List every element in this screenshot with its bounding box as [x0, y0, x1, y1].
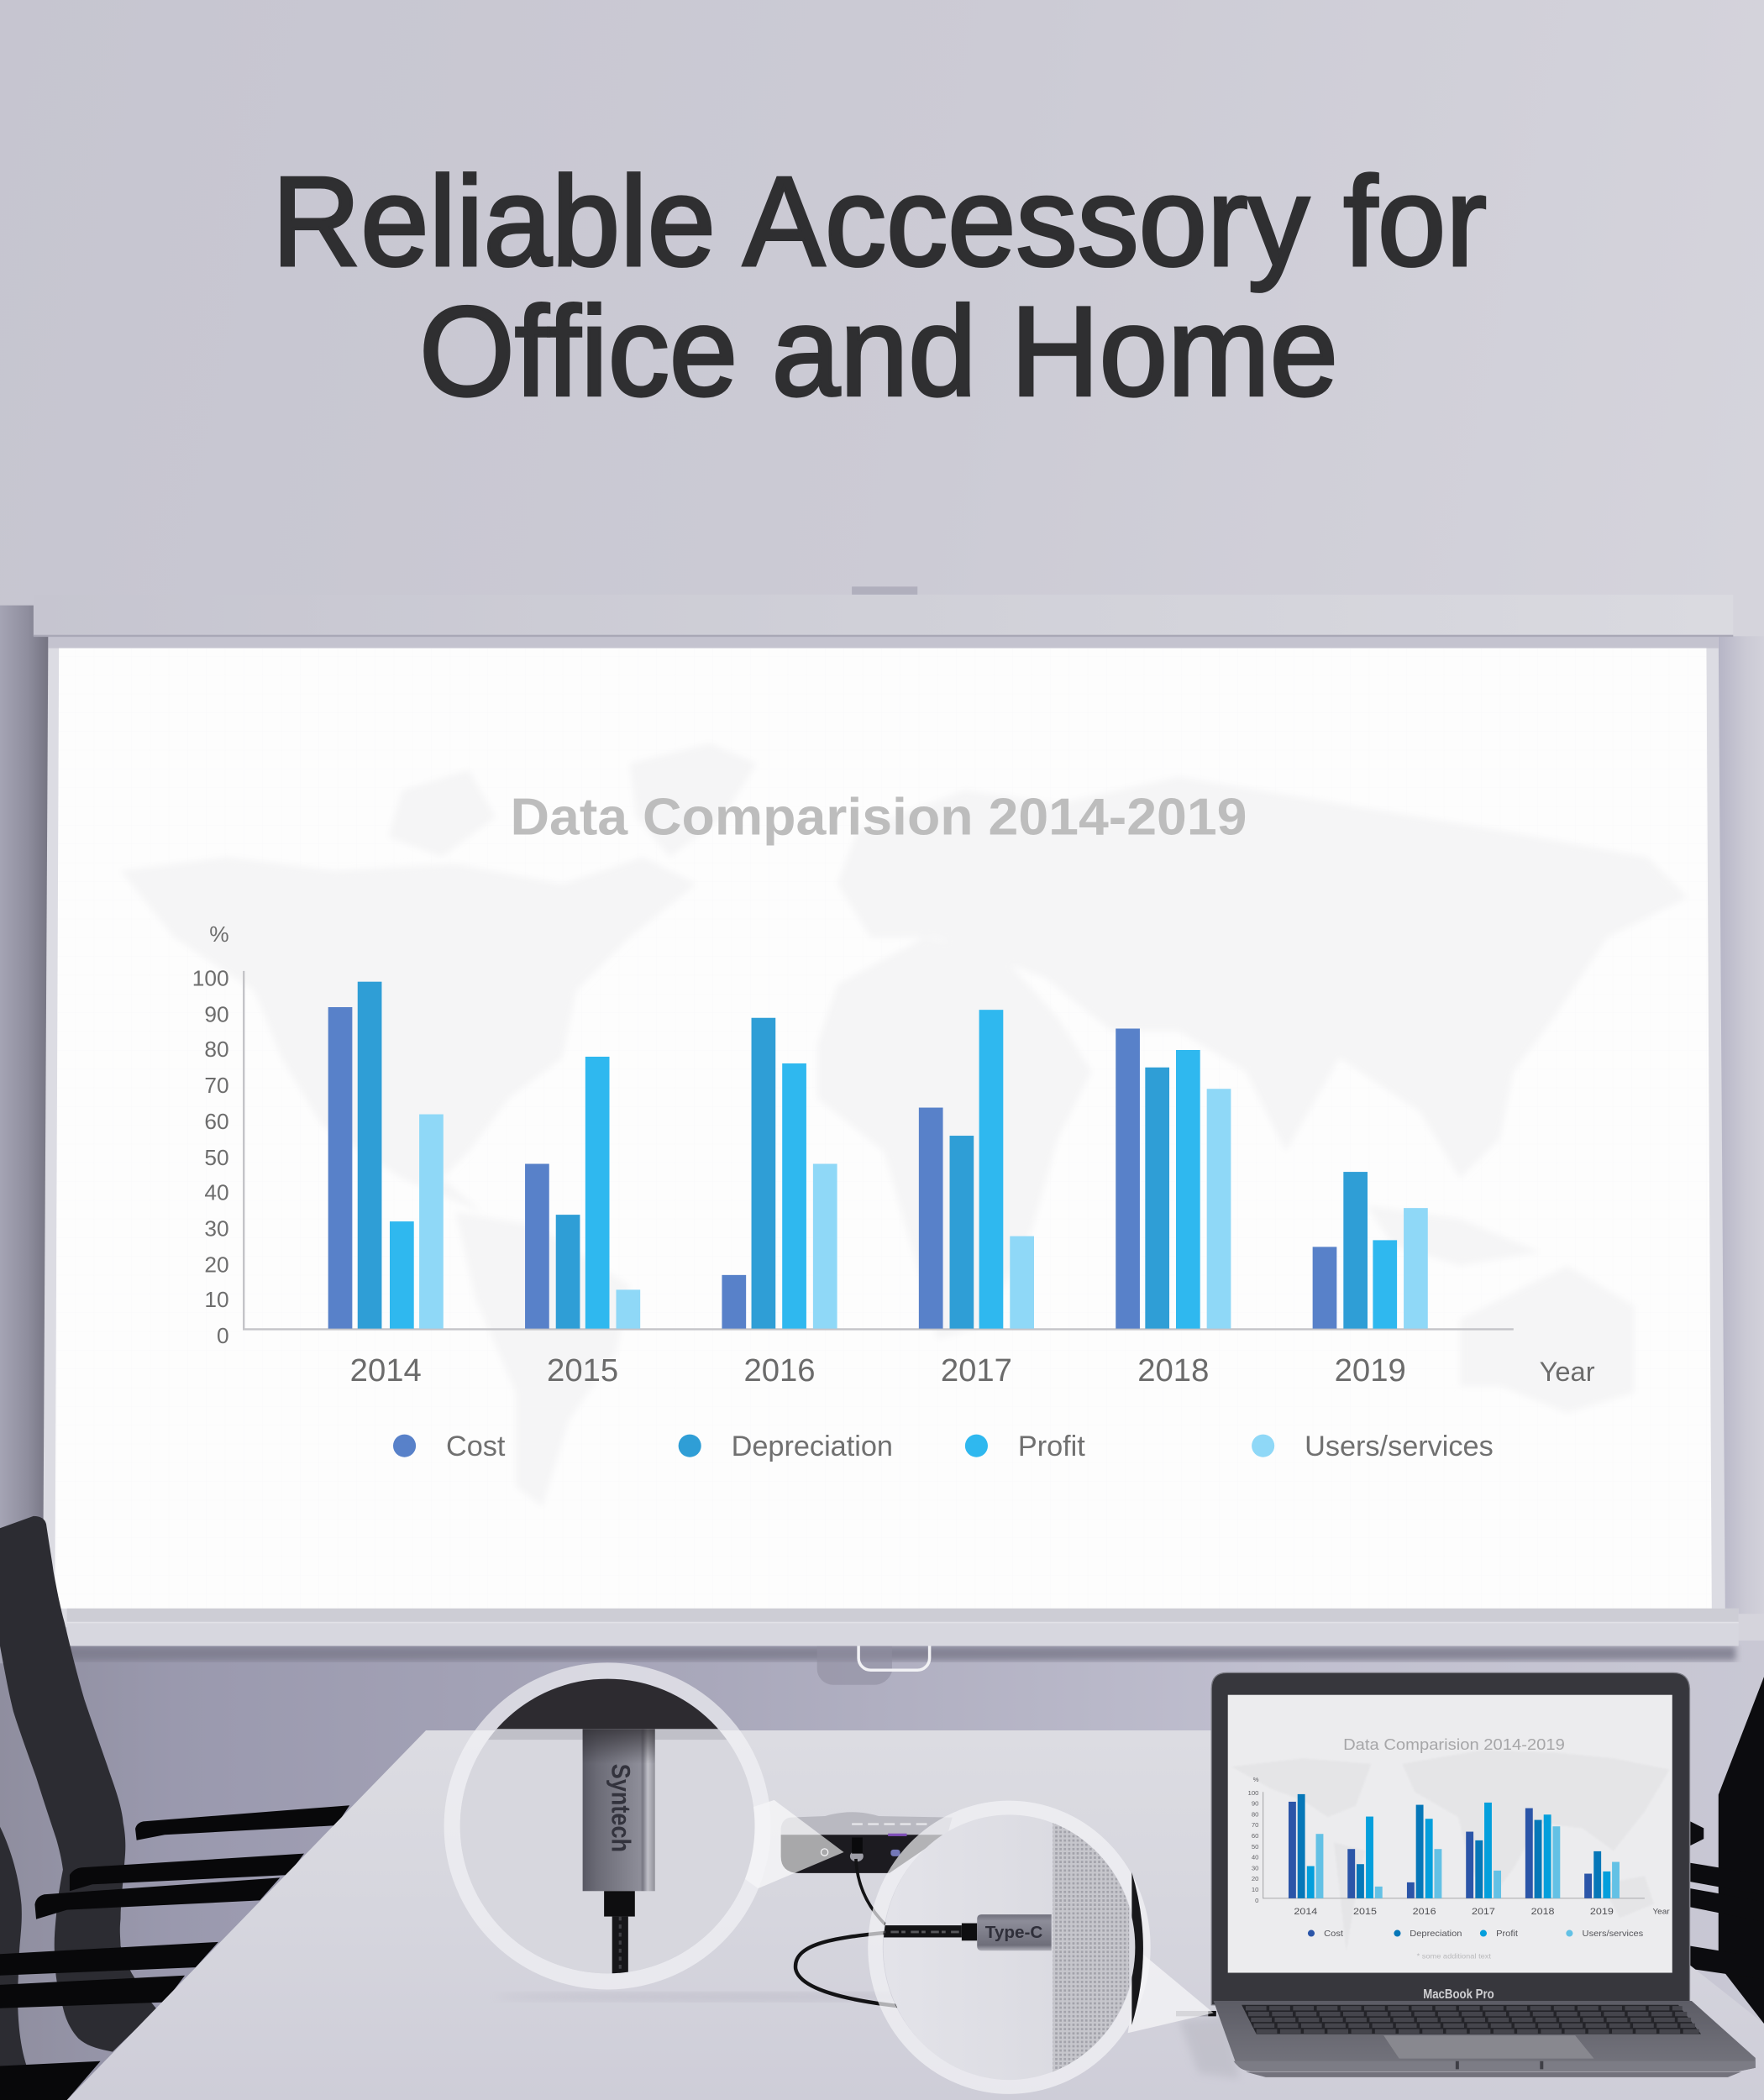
top frame band — [48, 636, 1719, 648]
left chair — [0, 1516, 349, 2100]
table — [67, 1730, 1764, 2100]
laptop x axis labels: 2019 — [1590, 1905, 1614, 1917]
y axis labels: 70 — [204, 1073, 229, 1098]
laptop y axis labels: 90 — [1252, 1800, 1258, 1807]
chart legend: Depreciation — [732, 1431, 893, 1462]
axes — [244, 971, 1514, 1329]
laptop legend: Profit — [1496, 1929, 1518, 1939]
laptop base — [1214, 2001, 1756, 2071]
laptop y axis labels: 20 — [1252, 1876, 1258, 1882]
port — [850, 1851, 864, 1861]
laptop lid — [1211, 1672, 1690, 2005]
laptop screen — [1228, 1695, 1672, 1973]
laptop legend: Users/services — [1583, 1929, 1643, 1939]
x axis labels: 2016 — [743, 1352, 816, 1389]
world map watermark — [121, 743, 1688, 1507]
laptop y axis labels: 40 — [1252, 1854, 1258, 1861]
bars 2019 — [1313, 1172, 1428, 1329]
lower wall — [0, 1641, 1764, 2100]
laptop y axis labels: 10 — [1252, 1887, 1258, 1893]
right chair — [1690, 1677, 1764, 2024]
laptop edge crescent — [1131, 1872, 1143, 2025]
table shadow — [496, 1992, 1005, 2002]
adapter body — [583, 1729, 655, 1891]
screen frame — [43, 636, 1725, 1627]
monitor bezel — [496, 1678, 718, 1729]
y axis labels: 30 — [204, 1216, 229, 1242]
chart legend: Users/services — [1305, 1431, 1494, 1462]
laptop y axis labels: 30 — [1252, 1865, 1258, 1872]
title: Office and Home — [419, 281, 1338, 423]
strain relief — [962, 1924, 977, 1940]
laptop x axis labels: 2018 — [1531, 1905, 1555, 1917]
laptop keyboard — [1242, 2005, 1701, 2034]
pointer: right magnifier — [1128, 1953, 1214, 2033]
laptop y axis labels: 60 — [1252, 1833, 1258, 1840]
x axis labels: 2014 — [350, 1352, 422, 1389]
cable strain relief — [604, 1891, 635, 1917]
x axis labels — [350, 1352, 1595, 1389]
bars 2018 — [1116, 1028, 1231, 1329]
bars 2014 — [328, 982, 444, 1329]
bars 2015 — [525, 1057, 640, 1329]
y axis labels: 10 — [204, 1287, 229, 1312]
Type-C label: Type-C — [985, 1923, 1042, 1942]
x axis labels: Year — [1540, 1356, 1595, 1387]
laptop shadow on table — [1179, 2016, 1239, 2078]
y axis labels: 20 — [204, 1252, 229, 1278]
laptop legend: Depreciation — [1410, 1929, 1462, 1939]
laptop world map — [1231, 1750, 1670, 1951]
title — [272, 151, 1487, 423]
chart title: Data Comparision 2014-2019 — [511, 788, 1247, 846]
laptop y axis labels: 80 — [1252, 1811, 1258, 1818]
bars 2017 — [919, 1010, 1034, 1329]
shadow under screen — [61, 1646, 1736, 1661]
laptop y axis labels — [1248, 1776, 1259, 1904]
blue port — [890, 1850, 900, 1856]
bars 2016 — [722, 1018, 837, 1329]
screen shadow on left wall — [0, 606, 50, 1663]
y axis labels: 80 — [204, 1037, 229, 1062]
laptop legend: Cost — [1324, 1929, 1343, 1939]
laptop axes — [1263, 1792, 1645, 1898]
laptop legend — [1308, 1929, 1643, 1939]
laptop screen content — [1231, 1736, 1670, 1960]
pull handle — [817, 1646, 930, 1685]
laptop y axis labels: 100 — [1248, 1789, 1258, 1797]
title: Reliable Accessory for — [272, 151, 1487, 293]
roller hook — [852, 586, 917, 595]
laptop x axis labels: 2014 — [1294, 1905, 1318, 1917]
laptop speaker grille — [1053, 1823, 1129, 2071]
laptop front bevel — [1234, 2061, 1756, 2071]
projector screen — [34, 586, 1739, 1685]
laptop y axis labels: 0 — [1255, 1897, 1258, 1904]
second chair back — [0, 1827, 27, 2100]
laptop base shadow — [1246, 2072, 1741, 2077]
chart legend — [393, 1431, 1494, 1462]
y axis labels: 40 — [204, 1180, 229, 1205]
white projection surface — [55, 648, 1712, 1609]
laptop x axis labels: 2015 — [1353, 1905, 1377, 1917]
laptop model label: MacBook Pro — [1423, 1987, 1494, 2002]
armrests — [0, 1805, 349, 2100]
status strip — [888, 1834, 906, 1836]
device top buttons — [852, 1824, 927, 1825]
y axis labels: 60 — [204, 1109, 229, 1134]
y axis labels: 0 — [217, 1323, 229, 1348]
laptop trackpad — [1383, 2035, 1593, 2059]
laptop y axis labels: % — [1253, 1776, 1259, 1783]
mini PC — [781, 1812, 953, 1873]
braided cable — [612, 1917, 628, 1974]
Type-C body — [977, 1914, 1052, 1950]
laptop x axis labels: Year — [1652, 1908, 1670, 1916]
bottom bar — [67, 1609, 1739, 1646]
y axis labels — [192, 921, 229, 1348]
power button — [821, 1849, 828, 1856]
magnifier: Type-C connector — [870, 1801, 1152, 2096]
x axis labels: 2017 — [941, 1352, 1012, 1389]
device top surface — [781, 1812, 953, 1836]
laptop x axis labels — [1294, 1905, 1670, 1917]
laptop footnote: * some additional text — [1417, 1952, 1492, 1960]
chart legend: Profit — [1018, 1431, 1085, 1462]
device front — [781, 1835, 946, 1873]
y axis labels: % — [209, 921, 229, 947]
laptop chart title: Data Comparision 2014-2019 — [1343, 1736, 1565, 1754]
braided cable — [884, 1925, 962, 1937]
laptop bars — [1289, 1794, 1620, 1898]
y axis labels: 100 — [192, 965, 229, 990]
roller housing — [34, 595, 1733, 636]
x axis labels: 2019 — [1335, 1352, 1406, 1389]
chair back — [0, 1516, 157, 2052]
y axis labels: 50 — [204, 1145, 229, 1170]
laptop x axis labels: 2017 — [1472, 1905, 1495, 1917]
laptop — [1211, 1672, 1756, 2077]
brand label: Syntech — [606, 1764, 636, 1852]
main bar chart — [192, 921, 1595, 1389]
device connector — [852, 1838, 863, 1854]
pointer: left magnifier — [739, 1800, 844, 1888]
magnifier: Syntech adapter — [452, 1671, 764, 1982]
laptop thumb notch — [1457, 2061, 1541, 2069]
y axis labels: 90 — [204, 1002, 229, 1027]
x axis labels: 2015 — [547, 1352, 618, 1389]
laptop x axis labels: 2016 — [1413, 1905, 1436, 1917]
laptop y axis labels: 70 — [1252, 1822, 1258, 1829]
adapter top shade — [583, 1729, 655, 1764]
cables on table — [795, 1859, 1216, 2013]
laptop y axis labels: 50 — [1252, 1843, 1258, 1851]
x axis labels: 2018 — [1137, 1352, 1209, 1389]
chart legend: Cost — [446, 1431, 506, 1462]
screen shadow on right wall — [1719, 636, 1764, 1614]
